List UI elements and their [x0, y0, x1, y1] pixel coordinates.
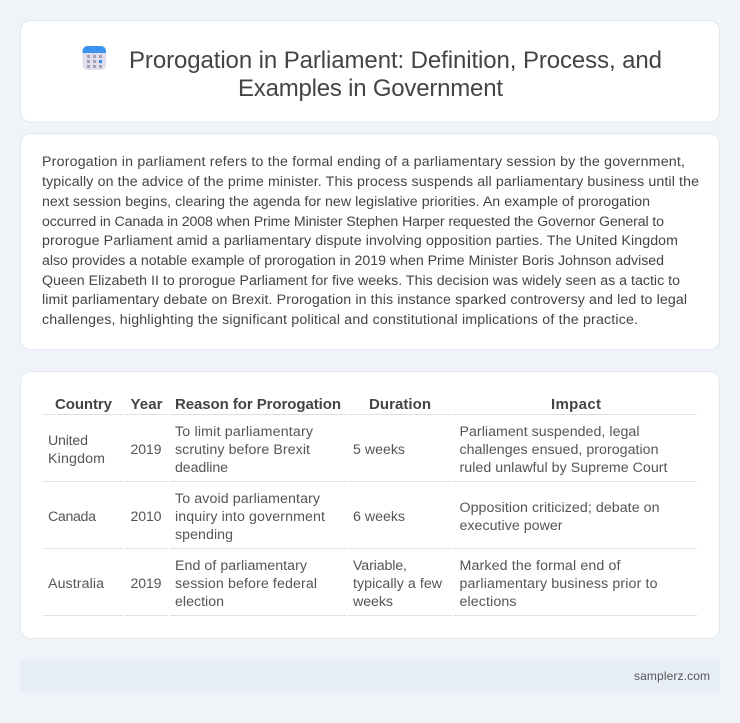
- table header row: Duration: [369, 396, 431, 413]
- table row: United Kingdom: challenges ensued, prorogation: [460, 442, 658, 458]
- text block: definition and examples: prorogue Parliament amid a parliamentary dispute involving opposition parties. The United Kingdom: [42, 233, 678, 249]
- text block: definition and examples: [42, 154, 699, 328]
- table row: United Kingdom: Kingdom: [48, 451, 105, 467]
- table row: Canada: inquiry into government: [175, 509, 325, 525]
- footer bar: [20, 659, 720, 693]
- table header row: Year: [130, 396, 163, 413]
- title: Examples in Government: [238, 75, 503, 102]
- icon: calendar: [82, 46, 106, 70]
- table row: Canada: executive power: [460, 518, 563, 534]
- table row: United Kingdom: Parliament suspended, legal: [460, 424, 640, 440]
- text block: definition and examples: typically on the advice of the prime minister. This process suspends all parliamentary business until the: [42, 174, 699, 190]
- table row: United Kingdom: United: [48, 433, 88, 449]
- text block: definition and examples: occurred in Canada in 2008 when Prime Minister Stephen Harper requested the Governor General to: [42, 214, 664, 230]
- table row: Canada: spending: [175, 527, 233, 543]
- text block: definition and examples: next session begins, clearing the agenda for new legislative priorities. An example of prorogation: [42, 194, 650, 210]
- title: [129, 47, 662, 102]
- table row: United Kingdom: ruled unlawful by Supreme Court: [460, 460, 668, 476]
- text block: definition and examples: Prorogation in parliament refers to the formal ending of a parliamentary session by the government,: [42, 154, 685, 170]
- table row: United Kingdom: To limit parliamentary: [175, 424, 314, 440]
- text block: definition and examples: Queen Elizabeth II to prorogue Parliament for five weeks. This decision was widely seen as a tactic to: [42, 273, 680, 289]
- footer source label: samplerz.com: [634, 669, 710, 683]
- table row: United Kingdom: deadline: [175, 460, 228, 476]
- table row: Canada: Canada: [48, 509, 96, 525]
- text block: definition and examples: also provides a notable example of prorogation in 2019 when Prime Minister Boris Johnson advised: [42, 253, 664, 269]
- table row: Australia: Variable,: [353, 558, 407, 574]
- table row: Canada: 6 weeks: [353, 509, 405, 525]
- table row: Australia: End of parliamentary: [175, 558, 308, 574]
- table row: Canada: [48, 491, 660, 543]
- table row: United Kingdom: 2019: [130, 442, 162, 458]
- table header row: Country: [55, 396, 113, 413]
- text block: definition and examples: limit parliamentary debate on Brexit. Prorogation in this instance sparked controversy and led to legal: [42, 292, 687, 308]
- table row: Australia: parliamentary business prior to: [460, 576, 658, 592]
- table row: Australia: typically a few: [353, 576, 443, 592]
- table row: Australia: Marked the formal end of: [460, 558, 621, 574]
- text block: definition and examples: challenges, highlighting the significant political and constitutional implications of the practice.: [42, 312, 638, 328]
- table row: Canada: 2010: [130, 509, 162, 525]
- table row: United Kingdom: scrutiny before Brexit: [175, 442, 310, 458]
- table row: Australia: Australia: [48, 576, 104, 592]
- table header row: Impact: [551, 396, 601, 413]
- table row: United Kingdom: [48, 424, 668, 476]
- panel: description paragraph: [20, 134, 720, 350]
- title: Prorogation in Parliament: Definition, Process, and: [129, 47, 662, 74]
- table row: Australia: 2019: [130, 576, 162, 592]
- table row: Australia: elections: [460, 594, 516, 610]
- header panel: [20, 20, 720, 122]
- table row: Australia: weeks: [352, 594, 393, 610]
- table row: Canada: To avoid parliamentary: [175, 491, 321, 507]
- table row: Australia: session before federal: [175, 576, 317, 592]
- table header row: [55, 396, 601, 413]
- panel: table: [20, 372, 720, 638]
- table row: United Kingdom: 5 weeks: [353, 442, 405, 458]
- table row: Canada: Opposition criticized; debate on: [460, 500, 660, 516]
- table header row: Reason for Prorogation: [175, 396, 341, 413]
- table row: Australia: [48, 558, 658, 610]
- table row: Australia: election: [175, 594, 224, 610]
